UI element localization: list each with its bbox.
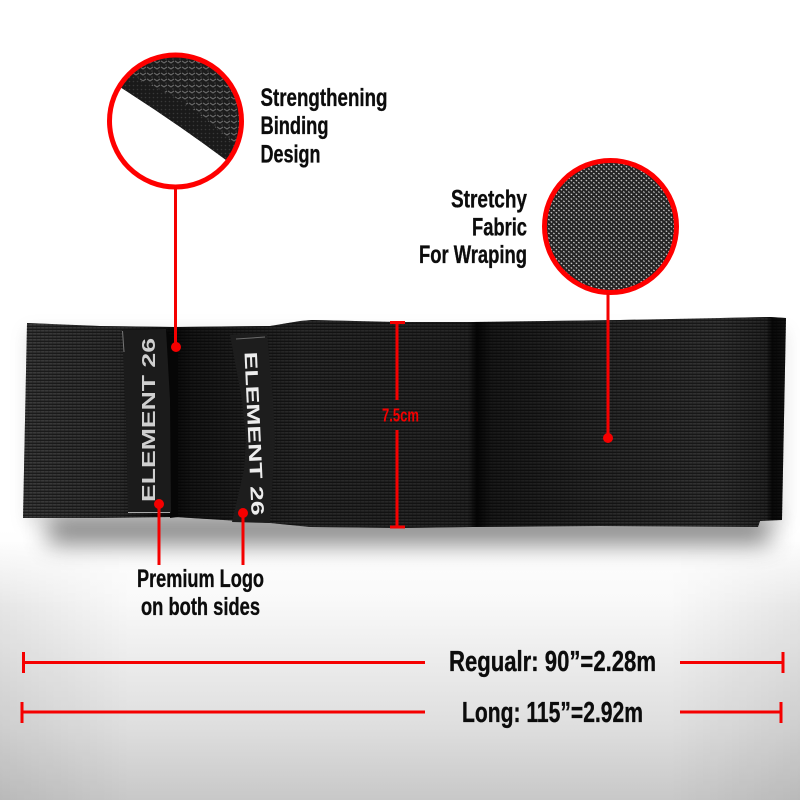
- callout: fabric detail circle: [544, 160, 676, 292]
- heading: logo: Premium Logo: [137, 565, 264, 593]
- heading: fabric: [419, 186, 527, 269]
- heading: binding: [260, 84, 388, 168]
- pointer: logo: [154, 499, 248, 565]
- heading: fabric: Fabric: [472, 214, 527, 242]
- callout: binding detail circle: [107, 52, 244, 190]
- heading: logo: on both sides: [141, 593, 260, 621]
- pointer: binding: [171, 187, 181, 352]
- black elastic band: [23, 317, 786, 528]
- dimension: long length: Long: 115”=2.92m: [462, 697, 643, 729]
- heading: binding: Design: [260, 140, 320, 168]
- heading: binding: Binding: [260, 112, 328, 140]
- label tag: left logo: ELEMENT 26: [139, 338, 159, 502]
- width dimension: 7.5cm: [382, 406, 419, 426]
- label tag: right logo: [230, 333, 275, 523]
- background edge shading: [0, 570, 800, 800]
- heading: binding: Strengthening: [260, 84, 388, 112]
- heading: fabric: For Wraping: [419, 241, 527, 269]
- dimension: regular length: Regualr: 90”=2.28m: [449, 646, 656, 678]
- pointer: fabric: [603, 293, 613, 443]
- band shadow: [26, 330, 786, 544]
- label tag: left logo: [122, 329, 178, 518]
- heading: logo: [137, 565, 264, 621]
- label tag: right logo: ELEMENT 26: [241, 351, 268, 516]
- heading: fabric: Stretchy: [451, 186, 527, 214]
